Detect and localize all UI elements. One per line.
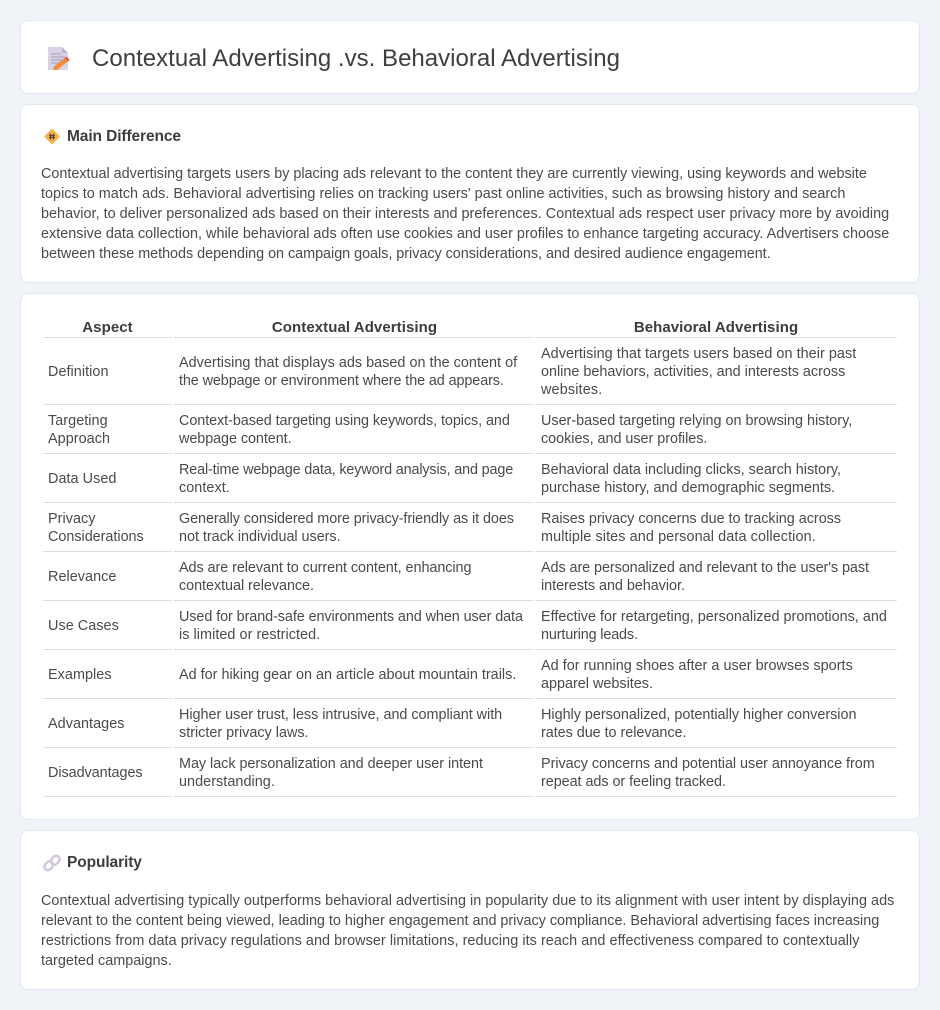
table row: privacy considerations: Raises privacy concerns due to tracking across <box>541 511 841 527</box>
title: Contextual Advertising .vs. Behavioral Advertising <box>92 45 620 72</box>
table row: advantages <box>48 707 856 741</box>
table row: definition: the webpage or environment where the ad appears. <box>179 373 504 389</box>
table row: data used: Real-time webpage data, keyword analysis, and page <box>179 462 513 478</box>
text block: main difference: between these methods depending on campaign goals, privacy considerations, and desired audience engagement. <box>41 246 771 262</box>
text block: main difference: Contextual advertising targets users by placing ads relevant to the content they are currently viewing, using keywords and website <box>41 166 867 182</box>
table row: examples <box>48 658 853 692</box>
table header: aspect: Aspect <box>82 319 133 336</box>
table row: targeting approach: webpage content. <box>179 431 292 447</box>
table row: targeting approach: Approach <box>48 431 110 447</box>
panel: popularity <box>20 830 920 990</box>
text block: popularity: targeted campaigns. <box>41 953 172 969</box>
table row: definition <box>48 346 856 398</box>
table header: contextual advertising: Contextual Advertising <box>272 319 437 336</box>
table row: disadvantages <box>48 756 875 790</box>
table row: data used: purchase history, and demographic segments. <box>541 480 835 496</box>
table row: definition: online behaviors, activities, and interests across <box>541 364 845 380</box>
table row: relevance <box>48 560 869 594</box>
table row: relevance: Ads are personalized and relevant to the user's past <box>541 560 869 576</box>
table row: disadvantages: May lack personalization and deeper user intent <box>179 756 483 772</box>
text block: main difference: topics to match ads. Behavioral advertising relies on tracking users' past online activities, such as browsing history and search <box>41 186 845 202</box>
table row: relevance: Relevance <box>48 569 116 585</box>
icon: document with pencil <box>48 47 70 70</box>
text block: main difference: behavior, to deliver personalized ads based on their interests and preferences. Contextual ads respect user privacy more by avoiding <box>41 206 889 222</box>
panel: main difference <box>20 104 920 283</box>
table row: advantages: stricter privacy laws. <box>179 725 309 741</box>
table row: advantages: Highly personalized, potentially higher conversion <box>541 707 856 723</box>
text block: popularity: Contextual advertising typically outperforms behavioral advertising in popularity due to its alignment with user intent by displaying ads <box>41 893 894 909</box>
table row: advantages: Advantages <box>48 716 125 732</box>
table row: disadvantages: Disadvantages <box>48 765 143 781</box>
heading: main difference: Main Difference <box>67 128 181 145</box>
heading: popularity: Popularity <box>67 854 142 871</box>
table row: use cases <box>48 609 887 643</box>
table row: data used: Behavioral data including clicks, search history, <box>541 462 841 478</box>
text block: main difference <box>41 166 889 262</box>
table row: advantages: Higher user trust, less intrusive, and compliant with <box>179 707 502 723</box>
table row: data used: context. <box>179 480 230 496</box>
table row: privacy considerations: Generally considered more privacy-friendly as it does <box>179 511 514 527</box>
table row: privacy considerations: not track individual users. <box>179 529 341 545</box>
table row: disadvantages: repeat ads or feeling tracked. <box>541 774 726 790</box>
table row: examples: Ad for running shoes after a user browses sports <box>541 658 853 674</box>
table row: disadvantages: understanding. <box>179 774 275 790</box>
table row: use cases: is limited or restricted. <box>179 627 320 643</box>
table row: use cases: Effective for retargeting, personalized promotions, and <box>541 609 887 625</box>
table row: examples: Examples <box>48 667 112 683</box>
table row: relevance: Ads are relevant to current content, enhancing <box>179 560 471 576</box>
table row: privacy considerations <box>48 511 841 545</box>
table row: targeting approach: Context-based targeting using keywords, topics, and <box>179 413 510 429</box>
table row: privacy considerations: Considerations <box>48 529 144 545</box>
table row: targeting approach: Targeting <box>48 413 108 429</box>
text block: main difference: extensive data collection, while behavioral ads often use cookies and user profiles to enhance targeting accuracy. Advertisers choose <box>41 226 889 242</box>
text block: popularity: restrictions from data privacy regulations and browser limitations, reducing its reach and effectiveness compared to contextually <box>41 933 860 949</box>
icon: chain link <box>43 854 61 872</box>
table row: disadvantages: Privacy concerns and potential user annoyance from <box>541 756 875 772</box>
table row: targeting approach: cookies, and user profiles. <box>541 431 707 447</box>
table row: data used <box>48 462 841 496</box>
table row: use cases: Used for brand-safe environments and when user data <box>179 609 523 625</box>
table row: relevance: contextual relevance. <box>179 578 314 594</box>
table row: examples: Ad for hiking gear on an article about mountain trails. <box>179 667 516 683</box>
text block: popularity: relevant to the content being viewed, leading to higher engagement and privacy compliance. Behavioral advertising faces increasing <box>41 913 879 929</box>
table row: privacy considerations: multiple sites and personal data collection. <box>541 529 816 545</box>
text block: popularity <box>41 893 894 969</box>
table row: targeting approach <box>48 413 852 447</box>
header card <box>20 20 920 94</box>
table row: use cases: nurturing leads. <box>541 627 638 643</box>
table row: use cases: Use Cases <box>48 618 119 634</box>
table row: definition: Advertising that displays ads based on the content of <box>179 355 517 371</box>
table row: advantages: rates due to relevance. <box>541 725 686 741</box>
table row: privacy considerations: Privacy <box>48 511 96 527</box>
panel: comparison table <box>20 293 920 820</box>
table row: data used: Data Used <box>48 471 116 487</box>
table row: examples: apparel websites. <box>541 676 653 692</box>
table row: definition: Advertising that targets users based on their past <box>541 346 856 362</box>
table row: definition: Definition <box>48 364 108 380</box>
table row: relevance: interests and behavior. <box>541 578 685 594</box>
table row: targeting approach: User-based targeting relying on browsing history, <box>541 413 852 429</box>
table row: definition: websites. <box>541 382 602 398</box>
icon: diamond road sign <box>44 129 60 144</box>
table header: behavioral advertising: Behavioral Advertising <box>634 319 798 336</box>
